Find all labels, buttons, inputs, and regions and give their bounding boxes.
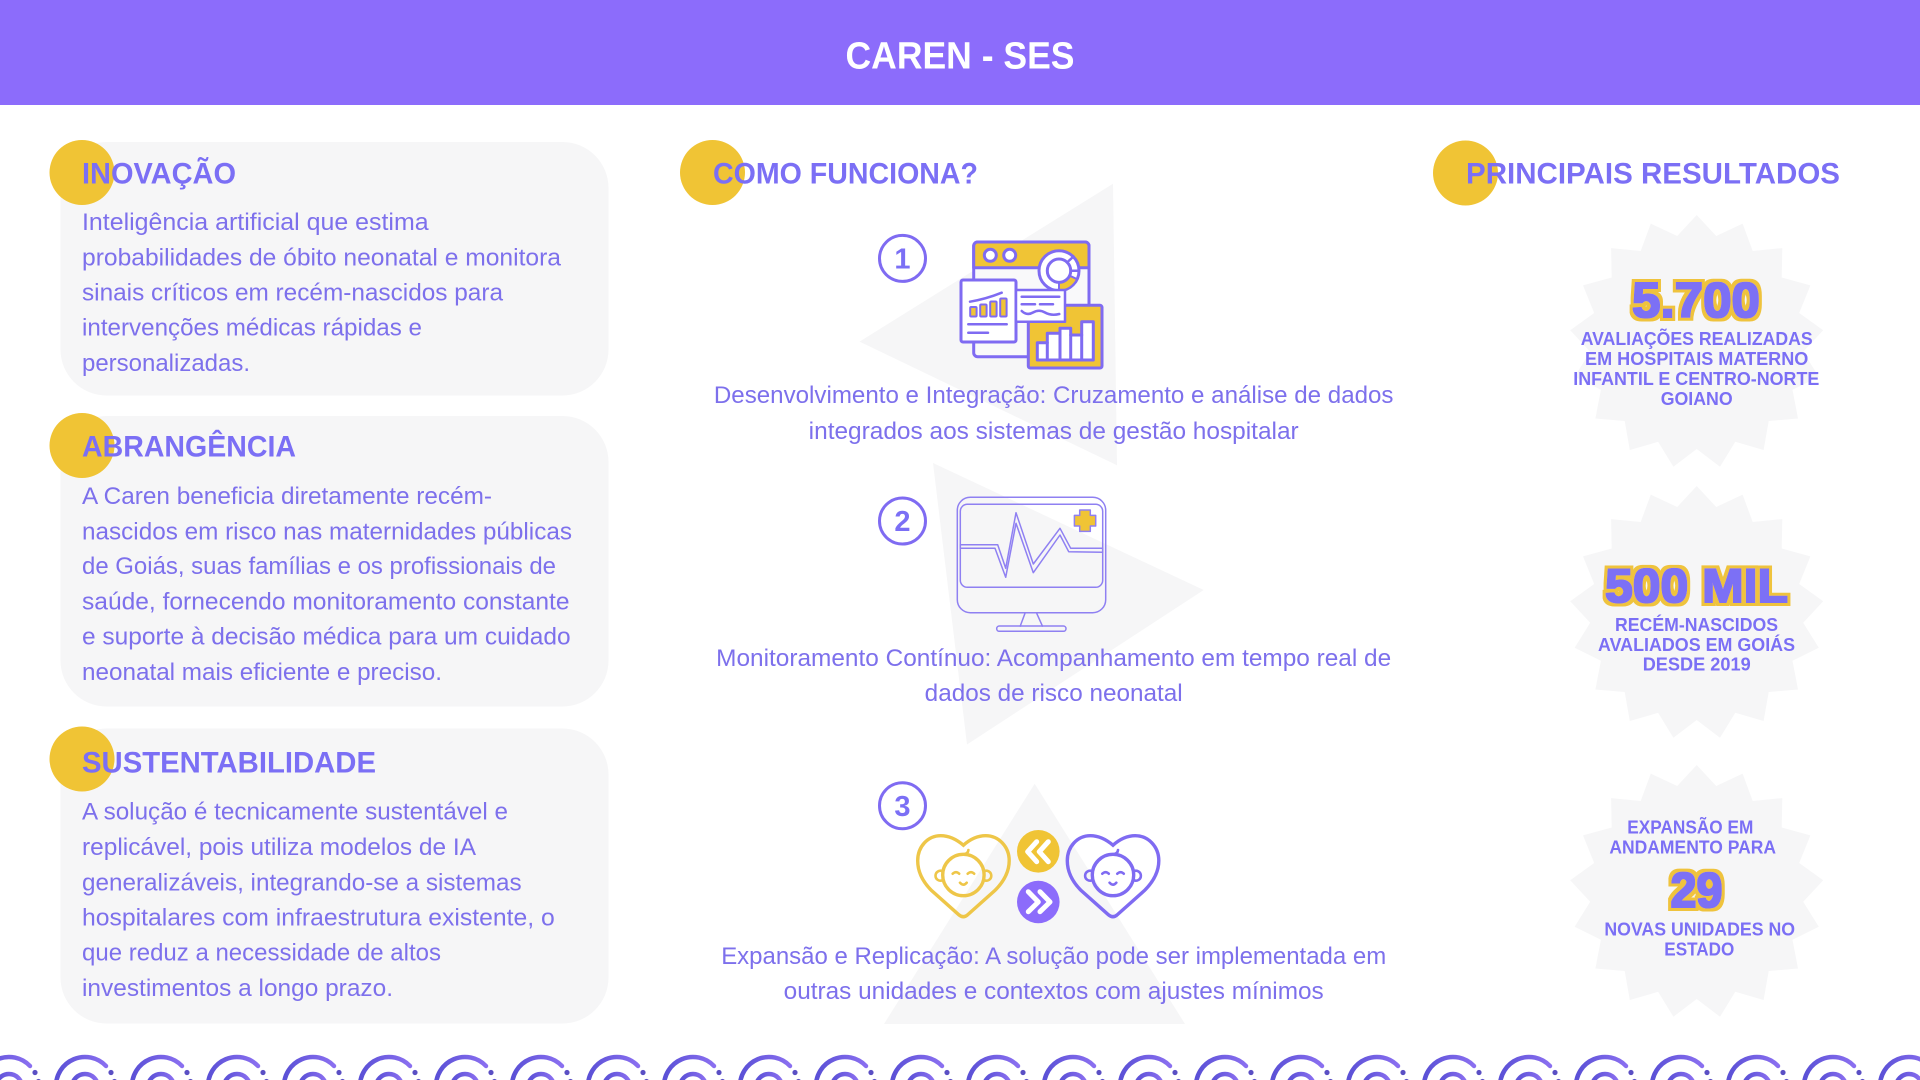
badge: step 2: 2	[894, 506, 911, 538]
stat: 500 mil	[1570, 486, 1823, 738]
text block: inovação: Inteligência artificial que estima	[82, 209, 429, 236]
text block: step 2	[716, 645, 1391, 707]
header bar	[0, 0, 1920, 105]
stat: 29	[1570, 765, 1823, 1017]
panel: abrangência	[50, 413, 608, 706]
text block: step 2: dados de risco neonatal	[925, 680, 1183, 707]
stat label: RECÉM-NASCIDOS	[1615, 614, 1778, 635]
text block: step 1	[714, 382, 1393, 445]
badge: step 3	[880, 783, 926, 829]
footer ring pattern	[0, 1057, 1920, 1080]
stat label bottom: ESTADO	[1664, 940, 1734, 960]
stat label top	[1609, 816, 1776, 858]
text block: abrangência: e suporte à decisão médica para um cuidado	[82, 624, 571, 650]
icon: yellow circle	[50, 140, 114, 205]
text block: sustentabilidade: A solução é tecnicamente sustentável e	[82, 798, 508, 826]
heading: principais resultados	[1433, 140, 1840, 206]
stat label bottom	[1604, 920, 1795, 960]
background triangle: step 1	[860, 184, 1117, 465]
text block: abrangência: saúde, fornecendo monitoramento constante	[82, 588, 570, 616]
text block: inovação: intervenções médicas rápidas e	[82, 314, 422, 342]
icon: yellow circle	[50, 726, 114, 792]
heading: como funciona: COMO FUNCIONA?	[713, 158, 978, 190]
panel: inovação	[50, 140, 608, 396]
heading: sustentabilidade: SUSTENTABILIDADE	[82, 746, 376, 780]
number: 500 mil: 500 MIL	[1605, 559, 1788, 612]
text block: inovação	[82, 209, 562, 377]
text block: step 1: integrados aos sistemas de gestão hospitalar	[809, 418, 1299, 445]
text block: abrangência	[82, 483, 572, 686]
icon: dashboard charts	[961, 242, 1102, 368]
text block: inovação: probabilidades de óbito neonatal e monitora	[82, 244, 562, 272]
stat label: EM HOSPITAIS MATERNO	[1585, 349, 1808, 369]
stat label top: EXPANSÃO EM	[1627, 816, 1753, 838]
icon: yellow baby heart	[918, 836, 1009, 917]
text block: step 3: Expansão e Replicação: A solução pode ser implementada em	[721, 943, 1386, 970]
text block: step 1: Desenvolvimento e Integração: Cruzamento e análise de dados	[714, 382, 1393, 409]
text block: sustentabilidade: investimentos a longo prazo.	[82, 975, 393, 1002]
background triangle: step 3	[884, 784, 1185, 1024]
icon: monitor with heartbeat	[957, 497, 1106, 631]
icon: purple right arrows	[1017, 881, 1060, 923]
text block: sustentabilidade: hospitalares com infraestrutura existente, o	[82, 904, 555, 932]
text block: sustentabilidade	[82, 798, 555, 1002]
stat label	[1598, 614, 1795, 674]
stat label	[1573, 328, 1819, 409]
badge: step 2	[880, 498, 926, 544]
text block: abrangência: neonatal mais eficiente e preciso.	[82, 659, 442, 686]
icon: yellow circle	[50, 413, 114, 478]
text block: sustentabilidade: generalizáveis, integrando-se a sistemas	[82, 870, 522, 896]
panel: sustentabilidade	[50, 726, 608, 1024]
text block: step 2: Monitoramento Contínuo: Acompanhamento em tempo real de	[716, 645, 1391, 672]
icon: purple baby heart	[1067, 836, 1159, 917]
stat label: GOIANO	[1661, 389, 1733, 409]
badge: step 1: 1	[894, 244, 911, 276]
heading: inovação: INOVAÇÃO	[82, 156, 236, 190]
badge: step 1	[880, 235, 926, 281]
text block: abrangência: A Caren beneficia diretamente recém-	[82, 483, 492, 510]
stat label: AVALIADOS EM GOIÁS	[1598, 634, 1795, 655]
number: 29: 29	[1670, 864, 1722, 918]
number: 5.700: 5.700	[1632, 274, 1760, 328]
stat label: INFANTIL E CENTRO-NORTE	[1573, 369, 1819, 389]
stat label bottom: NOVAS UNIDADES NO	[1604, 920, 1795, 940]
text block: sustentabilidade: replicável, pois utiliza modelos de IA	[82, 834, 476, 861]
text block: abrangência: nascidos em risco nas maternidades públicas	[82, 518, 572, 546]
stat label: DESDE 2019	[1643, 654, 1751, 674]
background triangle: step 2	[933, 463, 1204, 744]
badge: step 3: 3	[894, 791, 911, 823]
heading: como funciona	[680, 140, 978, 205]
text block: sustentabilidade: que reduz a necessidade de altos	[82, 940, 441, 966]
stat label top: ANDAMENTO PARA	[1609, 838, 1776, 858]
heading: abrangência: ABRANGÊNCIA	[82, 430, 296, 464]
text block: step 3	[721, 943, 1386, 1005]
heading: principais resultados: PRINCIPAIS RESULTADOS	[1466, 158, 1840, 190]
stat label: AVALIAÇÕES REALIZADAS	[1581, 328, 1813, 349]
stat: 5.700	[1570, 215, 1823, 467]
text block: inovação: sinais críticos em recém-nascidos para	[82, 280, 504, 306]
text block: abrangência: de Goiás, suas famílias e os profissionais de	[82, 553, 556, 580]
text block: inovação: personalizadas.	[82, 350, 250, 377]
text block: step 3: outras unidades e contextos com ajustes mínimos	[784, 978, 1324, 1005]
title: CAREN - SES	[846, 36, 1074, 78]
icon: yellow left arrows	[1017, 830, 1060, 873]
